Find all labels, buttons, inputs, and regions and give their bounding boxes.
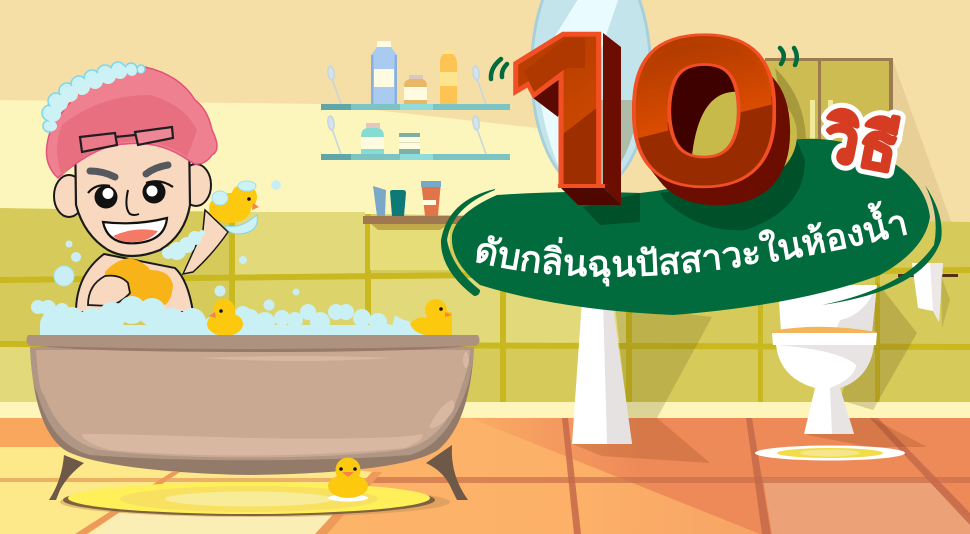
rubber duck on rug — [328, 458, 368, 502]
number 10 — [513, 32, 790, 206]
background: wall tiles — [0, 208, 970, 405]
word: วิธี: วิธี — [816, 101, 905, 186]
toilet paper — [898, 263, 958, 328]
bath foam — [31, 296, 432, 336]
foam on arm — [162, 230, 205, 260]
yellow bottle — [440, 50, 457, 104]
hand — [88, 276, 130, 306]
subtitle: ดับกลิ่นฉุนปัสสาวะในห้องน้ำ — [476, 200, 908, 286]
rubber duck on tub right — [410, 299, 452, 335]
rubber duck on tub left — [207, 299, 243, 336]
shelf bottom — [321, 154, 510, 160]
cabinet — [765, 58, 893, 168]
extrusion of 0: 0 — [632, 8, 782, 223]
seat lid — [771, 327, 877, 335]
flag of 1 — [521, 36, 590, 95]
tub highlights — [82, 352, 469, 456]
green title banner — [440, 138, 942, 315]
toilet shadow — [840, 282, 917, 410]
digit 0: 0 — [629, 7, 779, 222]
jar — [404, 75, 427, 104]
foam on cap — [42, 62, 145, 132]
left swoosh — [441, 189, 495, 296]
eyes — [88, 180, 173, 208]
extrusion of 0: 0 — [643, 24, 793, 239]
word: วิธี: วิธี — [816, 101, 905, 186]
shower cap — [46, 67, 217, 178]
extrusion of 1 — [603, 33, 621, 205]
digit 0: 0 — [629, 0, 779, 214]
glasses — [80, 127, 173, 152]
mouth — [103, 218, 167, 243]
digit 1 — [513, 32, 621, 205]
held duck — [209, 181, 259, 234]
toilet mat — [755, 446, 905, 460]
flying bubbles — [54, 180, 300, 310]
right swoosh — [822, 185, 942, 305]
face of 0: 0 — [629, 0, 779, 214]
counter with tubes — [363, 181, 465, 273]
sound marks — [491, 48, 797, 79]
banner blob — [452, 139, 930, 315]
cistern — [778, 285, 877, 332]
digit shadow — [583, 136, 805, 230]
hole shade of 0 — [668, 60, 740, 155]
character — [42, 62, 259, 312]
toothbrushes — [327, 66, 486, 154]
stacked jar — [399, 133, 420, 154]
olive backdrop behind zero — [673, 83, 797, 187]
shelf top — [321, 104, 510, 110]
eyebrows — [90, 165, 168, 177]
face — [75, 130, 190, 256]
extrusion of 0: 0 — [629, 3, 779, 218]
extrusion of 0: 0 — [639, 19, 789, 234]
tub body — [30, 347, 474, 475]
toilet — [755, 282, 927, 460]
ears — [54, 164, 211, 217]
rug — [60, 482, 450, 517]
extrusion of 0: 0 — [635, 14, 785, 229]
nose — [126, 190, 139, 215]
background: baseboard — [0, 402, 970, 419]
raised arm — [183, 210, 228, 274]
sponge — [105, 258, 173, 305]
tub rim — [26, 335, 480, 350]
torso — [76, 254, 193, 312]
face of 0: 0 — [629, 7, 779, 222]
bowl — [772, 333, 877, 434]
shelves — [321, 41, 510, 160]
tub feet — [49, 445, 468, 500]
bathtub — [26, 335, 480, 500]
green jar — [361, 123, 384, 154]
background: floor — [0, 418, 970, 534]
blue bottle — [371, 41, 397, 104]
mirror — [530, 0, 652, 192]
sink pedestal — [572, 300, 712, 463]
